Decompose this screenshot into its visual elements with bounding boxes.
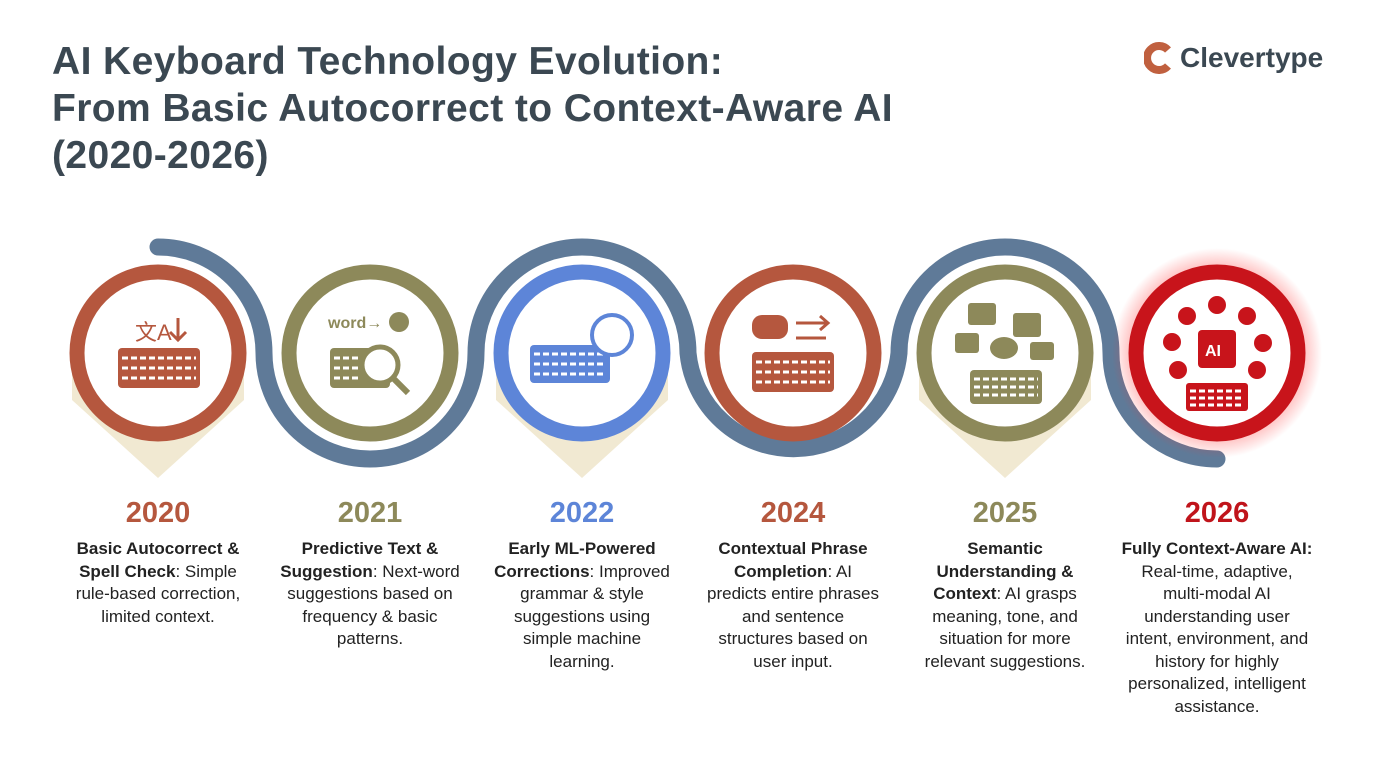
title [52,40,893,177]
col 2021: Predictive Text & Suggestion: Next-word suggestions based on frequency & basic patterns. [280,539,460,648]
col 2020: 2020 [126,497,190,529]
icon details: word→ [327,315,382,332]
col 2024: 2024 [761,497,825,529]
col 2025: 2025 [973,497,1037,529]
col 2025: Semantic Understanding & Context: AI grasps meaning, tone, and situation for more relevant suggestions. [925,539,1085,670]
wave path [158,247,1217,459]
icons: keyboards [118,345,1248,411]
col 2021: 2021 [338,497,402,529]
shields [72,340,1091,478]
col 2024: Contextual Phrase Completion: AI predicts entire phrases and sentence structures based on user input. [707,539,879,670]
col 2022: 2022 [550,497,614,529]
col 2026: 2026 [1185,497,1249,529]
title: AI Keyboard Technology Evolution: [52,40,723,83]
icon details [135,296,1272,393]
logo: Clevertype [1180,42,1323,73]
icon details: 文A [135,320,172,345]
icon details: AI [1205,343,1221,360]
title: From Basic Autocorrect to Context-Aware AI [52,87,893,130]
col 2022: Early ML-Powered Corrections: Improved grammar & style suggestions using simple machine learning. [494,539,670,670]
col 2026: Fully Context-Aware AI: Real-time, adaptive, multi-modal AI understanding user intent, environment, and history for highly personalized, intelligent assistance. [1122,539,1312,716]
title: (2020-2026) [52,134,269,177]
col 2020 [76,497,240,626]
col 2020: Basic Autocorrect & Spell Check: Simple rule-based correction, limited context. [76,539,240,626]
circles [77,272,1298,434]
